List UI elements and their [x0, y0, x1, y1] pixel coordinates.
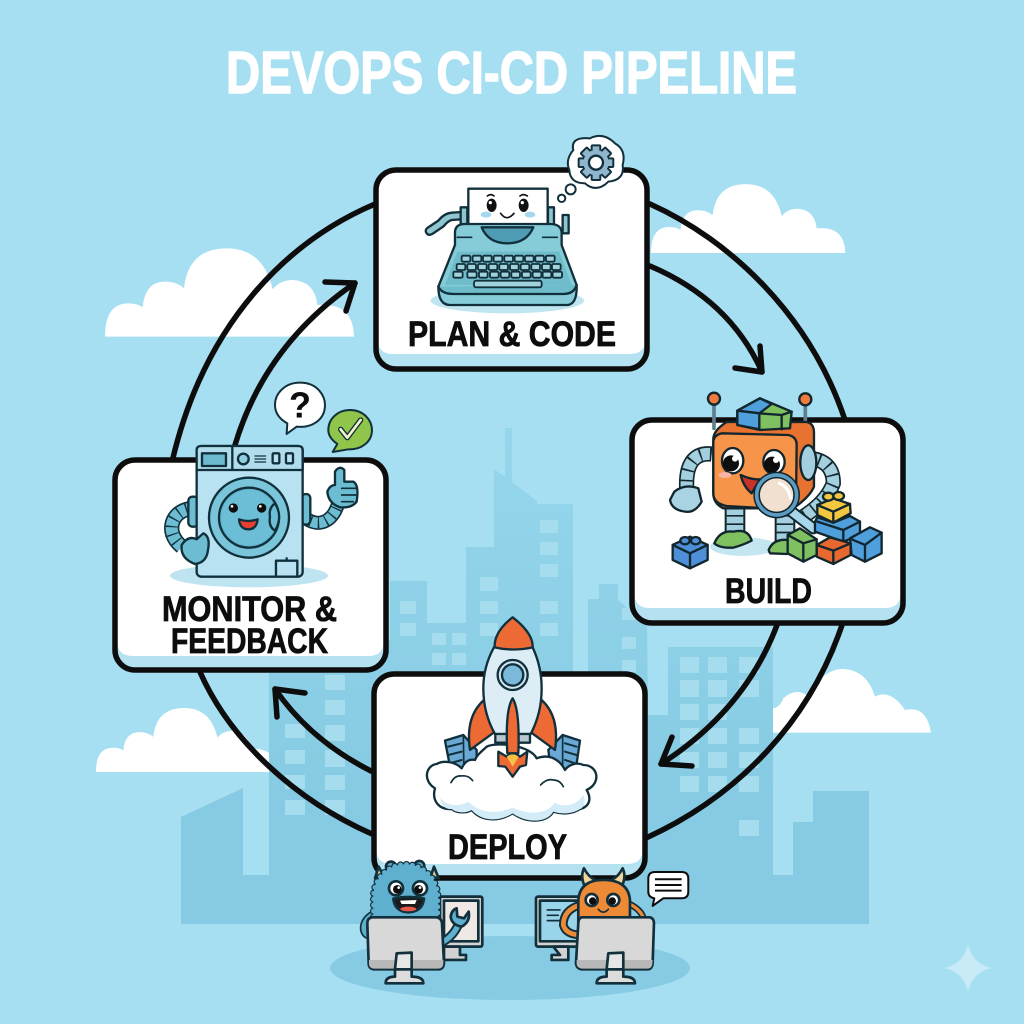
- arrow: plan to build: [650, 266, 762, 372]
- arrow: build to deploy: [661, 625, 777, 766]
- icon: robot with bricks: [670, 393, 882, 568]
- title: DEVOPS CI-CD PIPELINE: [226, 40, 797, 106]
- cloud: lower left: [96, 708, 276, 772]
- label: deploy: DEPLOY: [448, 828, 567, 867]
- panel: build: [632, 393, 903, 623]
- label: monitor and feedback: FEEDBACK: [171, 622, 328, 661]
- label: monitor and feedback: [162, 590, 337, 661]
- icon: speech bubble with text lines: [648, 872, 688, 906]
- outer pipeline ring: [172, 204, 845, 838]
- label: monitor and feedback: MONITOR &: [162, 590, 337, 629]
- arrow: monitor to plan: [235, 282, 355, 445]
- sparkle star: [944, 944, 992, 992]
- cloud: upper right: [651, 184, 845, 253]
- city skyline: [181, 428, 869, 924]
- panel: deploy: [374, 617, 645, 878]
- icon: washing machine: [170, 446, 357, 587]
- icon: green check bubble: [328, 410, 372, 452]
- icon: rocket launching from cloud: [427, 617, 596, 821]
- icon: typewriter: [426, 189, 584, 313]
- ground shadow ellipse: [330, 936, 690, 1000]
- icon: question speech bubble: ?: [289, 385, 311, 426]
- label: plan and code: PLAN & CODE: [408, 315, 616, 354]
- cloud: upper left: [105, 248, 354, 337]
- character: blue monster at computer: [364, 861, 482, 983]
- panel: monitor and feedback: [115, 383, 386, 670]
- character: orange monster at computer: [536, 868, 654, 983]
- panel: plan and code: [376, 136, 647, 369]
- icon: thought bubble with gear: [558, 136, 624, 202]
- label: build: BUILD: [725, 572, 812, 611]
- cloud: lower right: [773, 669, 931, 733]
- arrow: deploy to monitor: [275, 689, 371, 771]
- icon: question speech bubble: [275, 383, 325, 434]
